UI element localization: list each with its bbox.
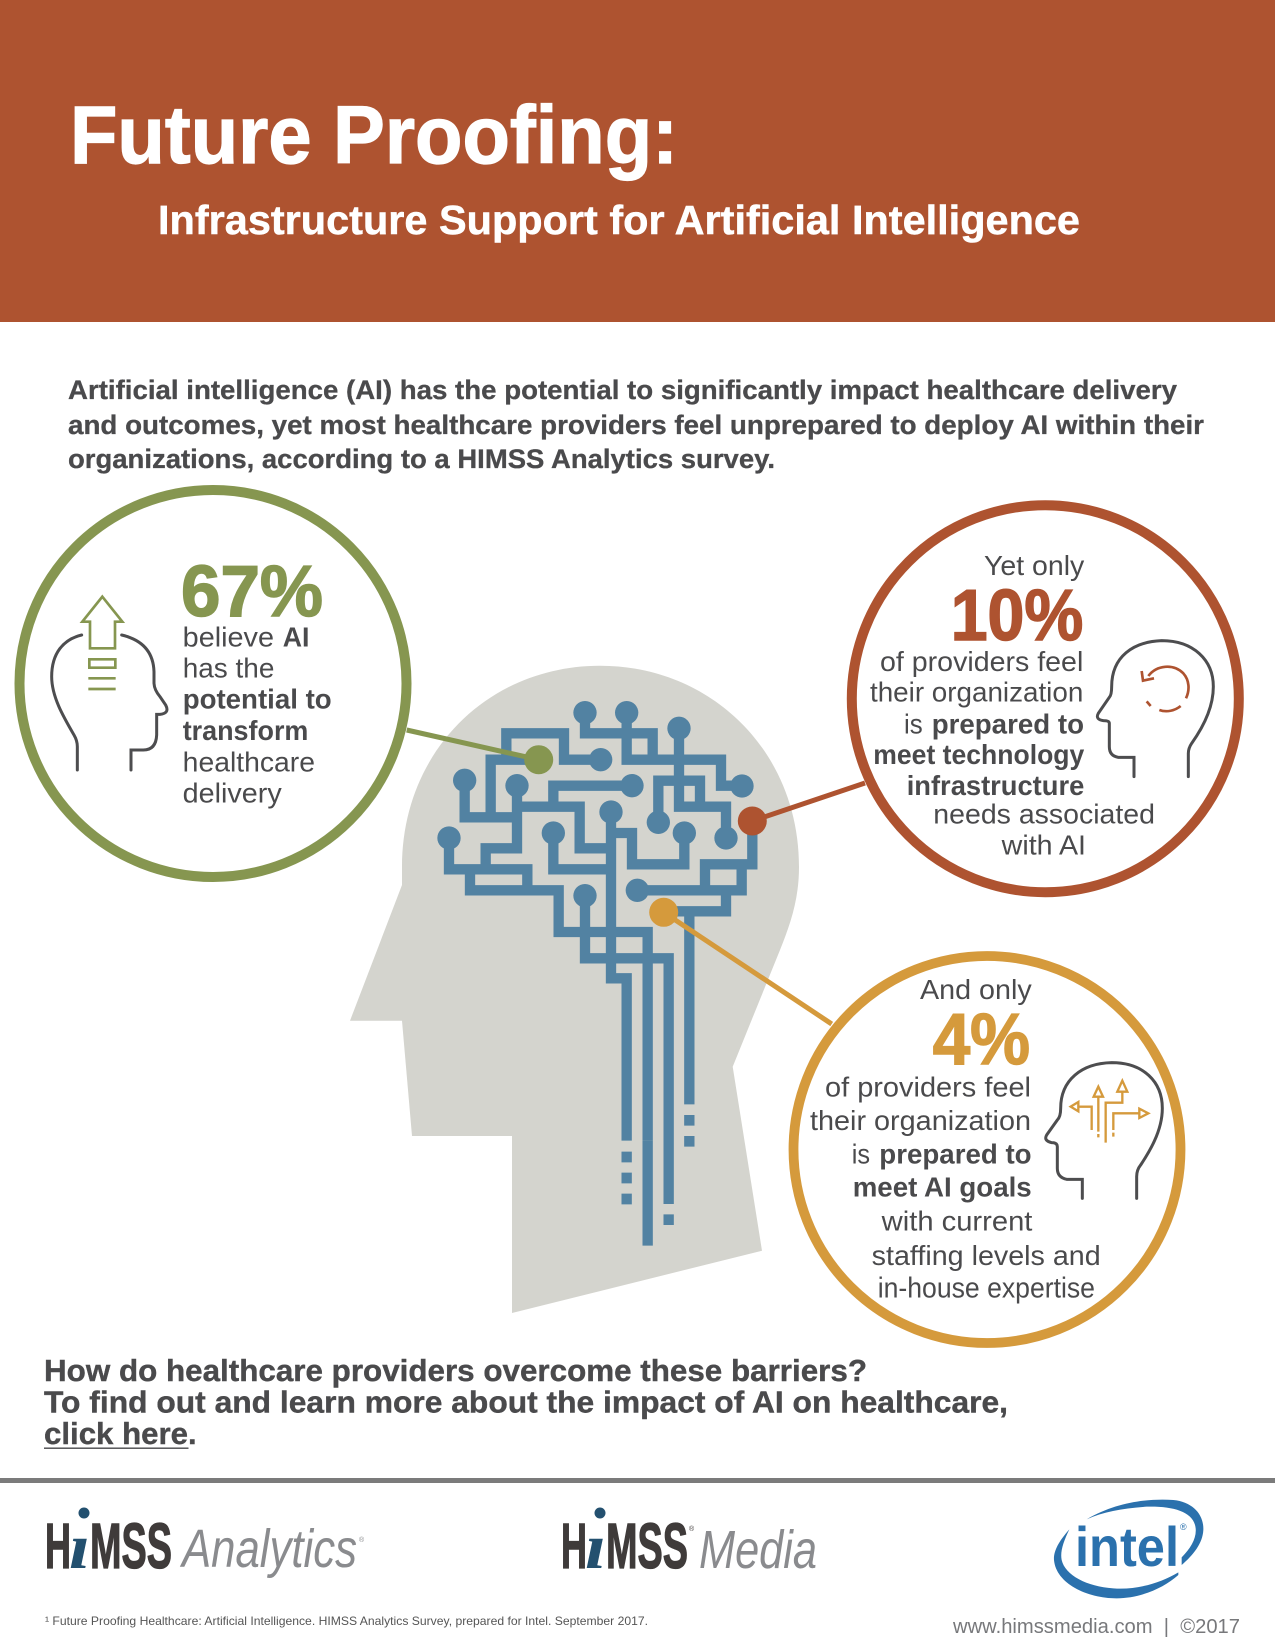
logo: HIMSS Analytics: ı bbox=[69, 1511, 90, 1582]
connector: red bbox=[738, 783, 865, 836]
panel: 67 percent bbox=[20, 490, 406, 877]
logo: HIMSS Analytics: MSS bbox=[90, 1510, 172, 1582]
stat description: has the bbox=[183, 652, 274, 683]
logo: HIMSS Media: ® bbox=[689, 1525, 695, 1533]
stat description: their organization bbox=[810, 1105, 1031, 1136]
stat description: needs associated bbox=[933, 798, 1155, 829]
logo: HIMSS Analytics: Analytics bbox=[180, 1519, 357, 1579]
website and copyright: www.himssmedia.com | ©2017 bbox=[952, 1616, 1240, 1638]
stat description: infrastructure bbox=[907, 770, 1084, 801]
stat description: prepared to bbox=[879, 1138, 1032, 1169]
icon: head with refresh arrow bbox=[1097, 641, 1213, 777]
logo: HIMSS Analytics bbox=[45, 1508, 365, 1582]
icon: head with diverging arrows bbox=[1046, 1063, 1162, 1198]
stat description: is bbox=[904, 708, 923, 739]
logo: HIMSS Analytics: ® bbox=[359, 1536, 365, 1544]
subtitle: Infrastructure Support for Artificial Intelligence bbox=[158, 197, 1080, 243]
stat description: with AI bbox=[1001, 829, 1086, 860]
logo: HIMSS Media: Media bbox=[699, 1520, 817, 1580]
icon: head with up arrow bbox=[52, 597, 167, 770]
intro paragraph: organizations, according to a HIMSS Analytics survey. bbox=[68, 444, 775, 474]
lead-in text: Yet only bbox=[984, 550, 1084, 581]
circuit brain bbox=[437, 701, 754, 1246]
connector: green bbox=[407, 730, 553, 774]
head silhouette bbox=[350, 666, 799, 1313]
logo: HIMSS Media: MSS bbox=[606, 1510, 688, 1582]
logo: HIMSS Analytics: H bbox=[45, 1510, 71, 1582]
stat: 10%: 10% bbox=[951, 576, 1083, 656]
intro paragraph: Artificial intelligence (AI) has the potential to significantly impact healthcare delivery bbox=[68, 375, 1177, 405]
logo: Intel: intel bbox=[1075, 1515, 1179, 1578]
stat description: prepared to bbox=[932, 708, 1084, 739]
stat description: meet technology bbox=[873, 739, 1085, 770]
call to action: To find out and learn more about the impact of AI on healthcare, bbox=[44, 1385, 1008, 1420]
logo: HIMSS Media: H bbox=[561, 1510, 587, 1582]
stat description: their organization bbox=[870, 677, 1083, 708]
stat description: transform bbox=[183, 715, 308, 746]
stat description: AI bbox=[283, 622, 309, 653]
stat description: potential to bbox=[183, 683, 332, 714]
logo: HIMSS Media bbox=[561, 1508, 817, 1582]
stat description: healthcare bbox=[183, 747, 315, 778]
logo: HIMSS Media: ı bbox=[585, 1511, 606, 1582]
stat description: with current bbox=[881, 1206, 1033, 1237]
stat description: is bbox=[852, 1138, 870, 1169]
intro paragraph bbox=[68, 375, 1204, 474]
lead-in text: And only bbox=[920, 974, 1032, 1005]
header banner bbox=[0, 0, 1275, 322]
call to action: click here bbox=[44, 1416, 188, 1451]
stat: 67%: 67% bbox=[181, 552, 323, 632]
logo: Intel: ® bbox=[1180, 1522, 1187, 1532]
stat description: of providers feel bbox=[825, 1072, 1031, 1103]
panel: 10 percent bbox=[852, 505, 1239, 892]
logo: Intel bbox=[1054, 1500, 1203, 1598]
footnote: ¹ Future Proofing Healthcare: Artificial Intelligence. HIMSS Analytics Survey, prepared for Intel. September 2017. bbox=[45, 1614, 648, 1628]
call to action: How do healthcare providers overcome these barriers? bbox=[44, 1353, 867, 1388]
stat description: meet AI goals bbox=[853, 1172, 1032, 1203]
intro paragraph: and outcomes, yet most healthcare providers feel unprepared to deploy AI within their bbox=[68, 410, 1204, 440]
footer rule bbox=[0, 1478, 1275, 1483]
call to action: . bbox=[188, 1416, 197, 1451]
call to action bbox=[44, 1353, 1008, 1451]
title: Future Proofing: bbox=[70, 90, 678, 181]
stat description: of providers feel bbox=[880, 646, 1083, 677]
stat description: in-house expertise bbox=[878, 1273, 1095, 1305]
stat description bbox=[183, 622, 332, 809]
stat description: staffing levels and bbox=[872, 1240, 1101, 1271]
stat: 4%: 4% bbox=[933, 1000, 1030, 1080]
stat description: believe bbox=[183, 622, 274, 653]
stat description bbox=[810, 1072, 1101, 1305]
stat description: delivery bbox=[183, 778, 282, 809]
connector: gold bbox=[649, 898, 832, 1024]
stat description bbox=[870, 646, 1155, 860]
panel: 4 percent bbox=[794, 956, 1180, 1343]
